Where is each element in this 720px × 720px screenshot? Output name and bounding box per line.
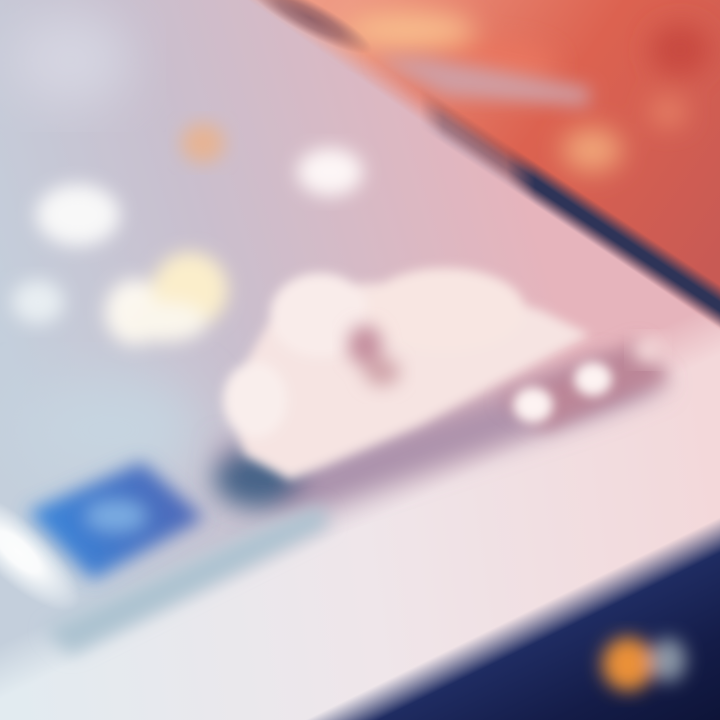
toolbar: pink strip with dots — [500, 337, 670, 430]
big cloud shadow — [214, 360, 670, 510]
icon: small cloud top centre — [297, 148, 363, 196]
logo: orange and grey badge — [602, 637, 686, 691]
icon: large cloud — [223, 268, 590, 480]
icon: cloud left — [36, 184, 120, 246]
tablet dark edge — [423, 96, 720, 328]
decorative element: orange glow top — [345, 12, 710, 172]
icon: figure inside cloud — [348, 325, 400, 386]
icon: small orange dot — [181, 123, 225, 163]
icon: blue card — [28, 462, 204, 580]
panel: red background top right — [252, 0, 720, 328]
icon: yellow and white cloud — [105, 252, 228, 345]
panel: dark banner edge — [230, 0, 400, 60]
tablet lower-left bezel — [0, 490, 330, 655]
icon: dot three — [633, 337, 663, 363]
icon: small cloud far left — [12, 280, 64, 324]
icon: dot one — [513, 387, 553, 423]
panel: banner shadow — [375, 58, 590, 106]
panel: lower screen area — [0, 319, 720, 720]
icon: dot two — [574, 362, 612, 396]
